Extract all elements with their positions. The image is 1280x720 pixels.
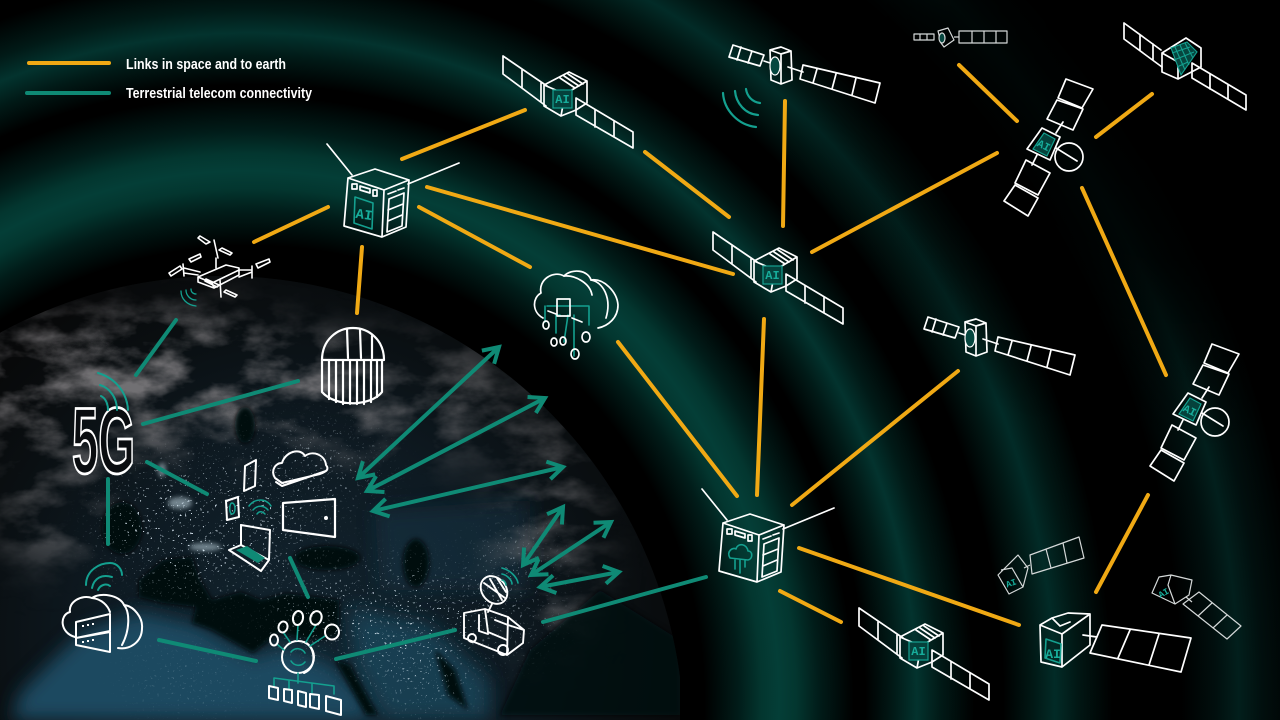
icon: AI cubesat: AI bbox=[354, 207, 373, 225]
icon: devices group bbox=[226, 451, 335, 571]
icon: small AI satellite grey bbox=[998, 537, 1084, 594]
icon: drone wifi bbox=[181, 289, 196, 306]
icon: broadcast van bbox=[464, 571, 524, 655]
icon: AI satellite top centre bbox=[503, 56, 633, 148]
phone screen bbox=[230, 503, 235, 514]
laptop keyboard bbox=[236, 546, 265, 563]
icon: satellite with green grid bbox=[1124, 23, 1246, 110]
laptop bbox=[229, 525, 270, 571]
icon: cloud with circuit bbox=[534, 271, 618, 359]
icon: observatory dome bbox=[322, 328, 384, 404]
earth at night bbox=[0, 270, 680, 720]
phone bbox=[226, 497, 239, 520]
icon: cloud cubesat bbox=[702, 489, 834, 582]
green double-headed arrows bbox=[358, 347, 619, 587]
icon: AI parabolic satellite upper right: AI bbox=[1034, 138, 1052, 155]
wifi bbox=[249, 500, 271, 514]
icon: drone bbox=[169, 236, 270, 297]
icon: AI satellite with single panel bbox=[1040, 613, 1191, 672]
orange links in space and to earth bbox=[254, 65, 1166, 625]
large tablet bbox=[283, 499, 335, 537]
icon: AI satellite centre bbox=[713, 232, 843, 324]
legend line: terrestrial bbox=[27, 91, 109, 95]
icon: small AI satellite grey: AI bbox=[1005, 577, 1018, 590]
legend label: links in space: Links in space and to earth bbox=[126, 56, 286, 73]
icon: AI satellite with single panel: AI bbox=[1045, 647, 1061, 662]
tablet button bbox=[324, 516, 328, 520]
icon: AI parabolic satellite right: AI bbox=[1180, 403, 1198, 420]
cloud outline bbox=[273, 451, 327, 486]
icon: small AI satellite grey right: AI bbox=[1157, 587, 1171, 601]
icon: observation satellite top bbox=[729, 45, 880, 103]
icon: van wifi bbox=[502, 568, 518, 585]
icon: small grey satellite bbox=[914, 28, 1007, 47]
icon: AI satellite bottom bbox=[859, 608, 989, 700]
icon: cloud server bbox=[63, 563, 142, 652]
legend line: links in space bbox=[29, 61, 109, 65]
icon: AI cubesat bbox=[327, 144, 459, 237]
icon: wifi signal top bbox=[723, 89, 760, 127]
icon: small AI satellite grey right bbox=[1152, 575, 1241, 639]
legend bbox=[27, 56, 313, 102]
icon: AI satellite centre: AI bbox=[765, 269, 780, 283]
icon: AI parabolic satellite upper right bbox=[1004, 79, 1093, 216]
icon: 5G: 5G bbox=[72, 388, 135, 493]
icon: observation satellite right bbox=[924, 317, 1075, 375]
icon: network with balloons bbox=[269, 610, 341, 715]
green terrestrial links bbox=[108, 320, 706, 661]
icon: 5G bbox=[72, 373, 135, 493]
legend label: terrestrial: Terrestrial telecom connectivity bbox=[126, 85, 313, 102]
icon: AI satellite bottom: AI bbox=[911, 645, 926, 659]
icon: AI parabolic satellite right bbox=[1150, 344, 1239, 481]
icon: AI satellite top centre: AI bbox=[555, 93, 570, 107]
tablet portrait bbox=[244, 460, 256, 491]
